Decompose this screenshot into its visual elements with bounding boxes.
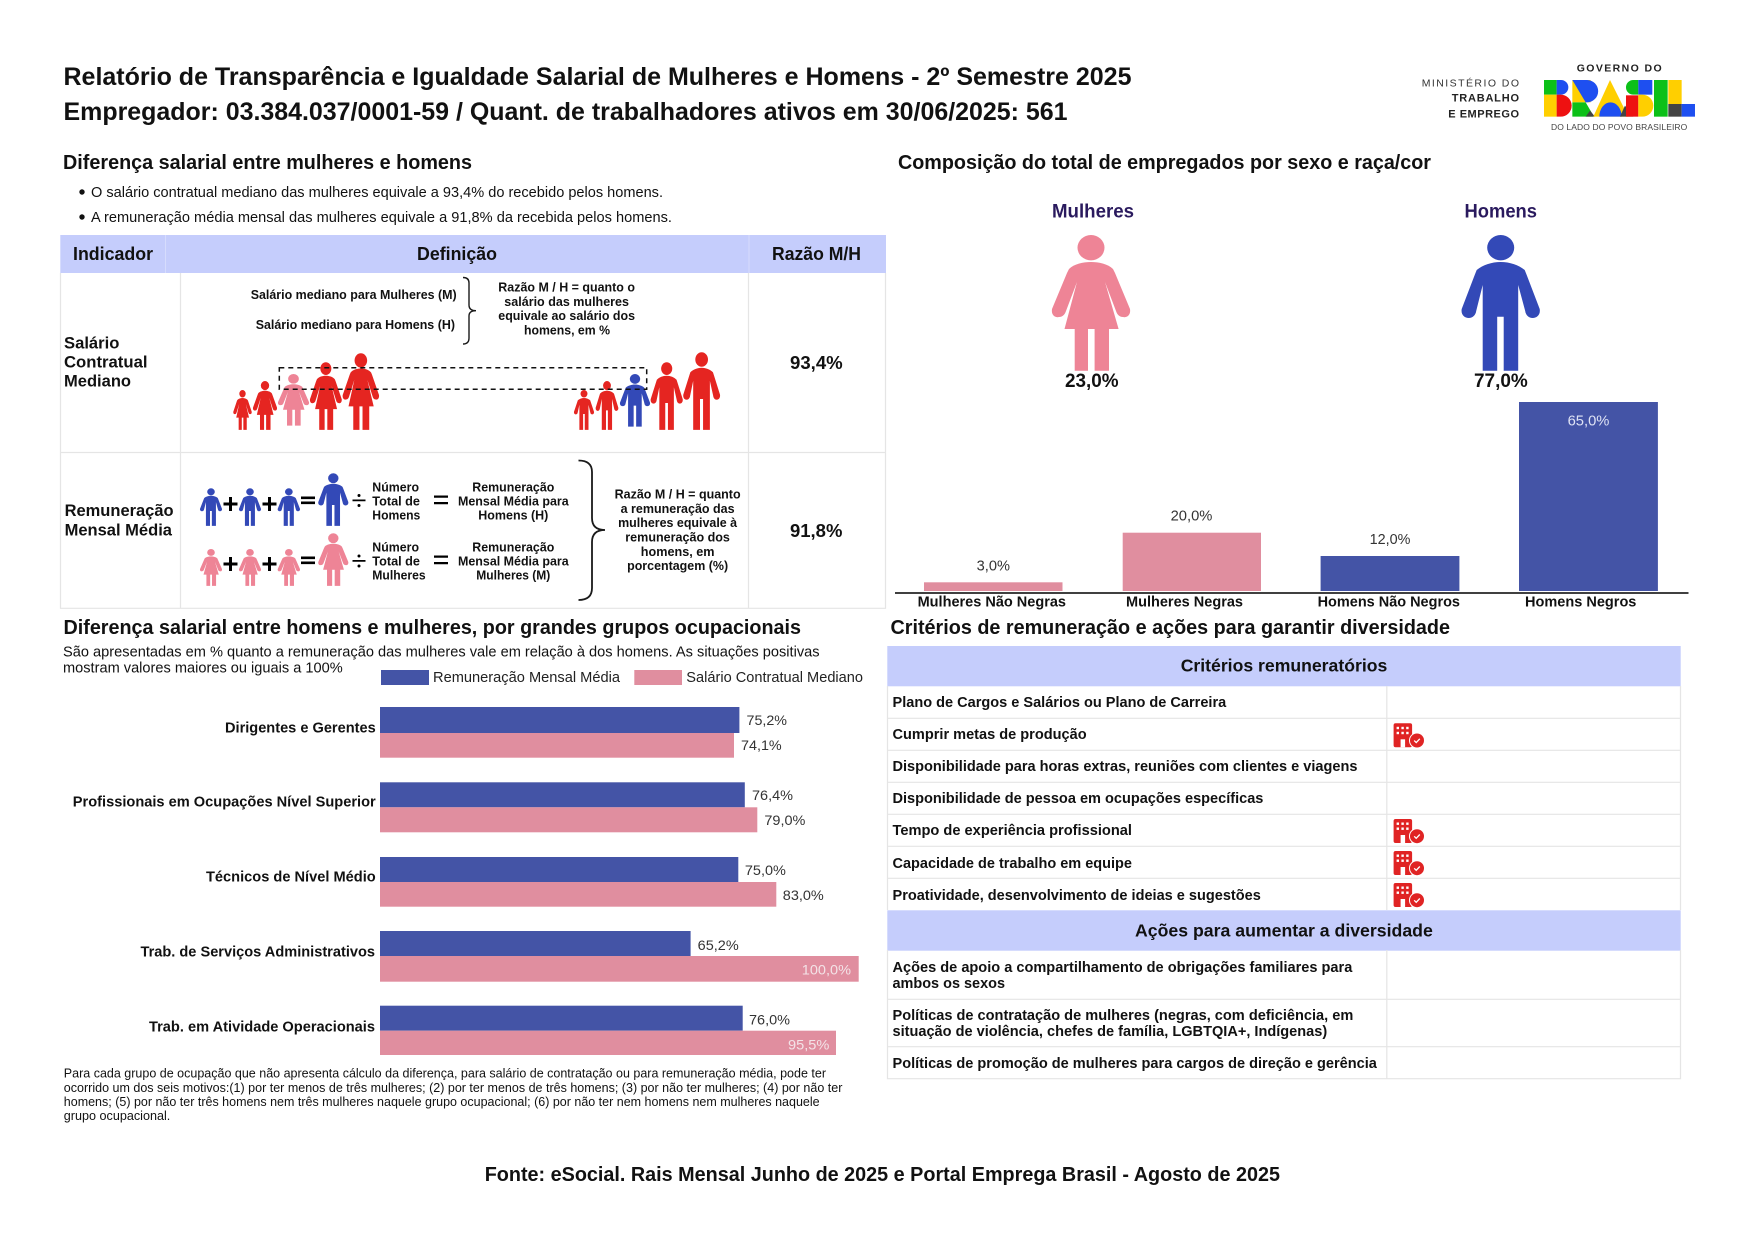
bullet list: O salário contratual mediano das mulheres equivale a 93,4% do recebido pelos homens.	[91, 184, 663, 201]
title: Relatório de Transparência e Igualdade Salarial de Mulheres e Homens - 2º Semestre 2025	[64, 63, 1132, 91]
column chart: 3,0%	[977, 559, 1010, 575]
row: remuneração mensal média	[65, 460, 842, 600]
icon: men ordered by salary	[574, 352, 720, 430]
men share: Homens	[1464, 201, 1537, 223]
panel: composição por sexo e raça/cor	[895, 152, 1688, 611]
footnote	[64, 1065, 843, 1123]
definition text: Razão M / H = quanto	[615, 487, 741, 502]
bars: dirigentes e gerentes	[225, 707, 787, 758]
formula: men: Número	[372, 480, 419, 495]
column chart: Homens Negros	[1525, 595, 1636, 611]
column chart: 65,0%	[1568, 414, 1609, 430]
row label: Remuneração	[65, 502, 174, 520]
dashed median box	[279, 368, 647, 389]
bars: dirigentes e gerentes: 75,2%	[746, 712, 787, 728]
bars: profissionais: Profissionais em Ocupações Nível Superior	[73, 795, 376, 811]
definition text	[251, 280, 635, 337]
definition text: homens, em	[641, 544, 714, 559]
bars: técnicos: 83,0%	[783, 887, 824, 903]
table: critérios remuneratórios	[887, 646, 1681, 910]
definition text: homens, em %	[524, 322, 610, 337]
bullet list	[79, 184, 672, 226]
table: critérios remuneratórios: Plano de Cargos e Salários ou Plano de Carreira	[892, 695, 1227, 711]
women share: 23,0%	[1065, 371, 1119, 392]
icon: women ordered by salary	[233, 353, 379, 430]
women share: Mulheres	[1052, 201, 1134, 223]
formula: men: Homens	[372, 507, 420, 522]
legend: Remuneração Mensal Média	[433, 670, 621, 686]
bullet list: A remuneração média mensal das mulheres equivale a 91,8% da recebida pelos homens.	[91, 209, 672, 226]
description: mostram valores maiores ou iguais a 100%	[63, 661, 343, 677]
bars: profissionais: 76,4%	[752, 787, 793, 803]
brace	[578, 460, 605, 600]
brace	[463, 278, 476, 344]
formula: men: Homens (H)	[478, 507, 548, 522]
row: salário contratual mediano	[64, 278, 843, 430]
title: Empregador: 03.384.037/0001-59 / Quant. de trabalhadores ativos em 30/06/2025: 561	[64, 98, 1068, 126]
source note: Fonte: eSocial. Rais Mensal Junho de 2025 e Portal Emprega Brasil - Agosto de 2025	[485, 1164, 1280, 1186]
table: ações para aumentar a diversidade: situação de violência, chefes de família, LGBTQIA+, Indígenas)	[892, 1024, 1327, 1040]
legend: Salário Contratual Mediano	[686, 670, 863, 686]
bars: atividade operacionais: 95,5%	[788, 1036, 829, 1052]
table header	[60, 235, 886, 273]
column chart: 12,0%	[1370, 532, 1410, 548]
bars: serviços administrativos: 65,2%	[698, 937, 739, 953]
value: 93,4%	[790, 353, 843, 373]
definition text: remuneração dos	[625, 530, 730, 544]
formula: women: Mulheres	[372, 567, 426, 582]
bars: serviços administrativos: 100,0%	[802, 961, 851, 977]
logo: governo do brasil: DO LADO DO POVO BRASILEIRO	[1551, 122, 1688, 132]
bars: atividade operacionais: 76,0%	[749, 1011, 790, 1027]
formula: women: Total de	[372, 554, 420, 569]
column chart: Homens Não Negros	[1318, 595, 1460, 611]
formula: men: Total de	[372, 494, 420, 509]
formula: women	[200, 533, 569, 586]
column chart: Mulheres Negras	[1126, 595, 1243, 611]
table: critérios remuneratórios: Critérios remuneratórios	[1181, 656, 1388, 676]
row label	[65, 502, 174, 539]
footnote: homens; (5) por não ter três homens nem três mulheres naquele grupo ocupacional; (6) por não ter nem homens nem mulheres naquele	[64, 1094, 820, 1109]
men share: 77,0%	[1474, 371, 1528, 392]
table: ações para aumentar a diversidade	[887, 910, 1681, 1079]
icon: company check	[1394, 819, 1425, 844]
women share	[1052, 201, 1134, 392]
row label	[64, 334, 148, 391]
bars: dirigentes e gerentes: Dirigentes e Gerentes	[225, 721, 376, 737]
logo: ministério do trabalho e emprego: TRABALHO	[1452, 93, 1519, 105]
row label: Salário	[64, 334, 119, 352]
column chart: 20,0%	[1171, 509, 1212, 525]
table header: Razão M/H	[772, 244, 861, 264]
table header: Indicador	[73, 244, 153, 264]
heading: Diferença salarial entre mulheres e homens	[63, 152, 472, 174]
table: ações para aumentar a diversidade: Políticas de contratação de mulheres (negras, com deficiência, em	[892, 1008, 1353, 1024]
panel: critérios de remuneração e ações	[887, 617, 1681, 1079]
definition text: Razão M / H = quanto o	[498, 280, 635, 295]
bars: serviços administrativos: Trab. de Serviços Administrativos	[140, 945, 375, 961]
footnote: grupo ocupacional.	[64, 1108, 170, 1123]
formula: women: Número	[372, 540, 419, 555]
formula: women: Remuneração	[472, 540, 554, 555]
men share	[1462, 201, 1540, 392]
icon: company check	[1394, 883, 1425, 908]
table: ações para aumentar a diversidade: Ações de apoio a compartilhamento de obrigações familiares para	[892, 960, 1353, 976]
row label: Contratual	[64, 354, 148, 372]
table: critérios remuneratórios: Capacidade de trabalho em equipe	[892, 856, 1132, 872]
column chart: Mulheres Não Negras	[918, 595, 1066, 611]
definition text: salário das mulheres	[504, 294, 629, 309]
definition text: equivale ao salário dos	[498, 308, 635, 323]
definition text: Salário mediano para Mulheres (M)	[251, 287, 457, 302]
table: critérios remuneratórios: Disponibilidade para horas extras, reuniões com clientes e viagens	[892, 759, 1358, 775]
bar chart	[73, 707, 859, 1055]
row label: Mensal Média	[65, 521, 173, 539]
formula: men	[200, 473, 569, 526]
bars: técnicos: 75,0%	[745, 862, 786, 878]
formula: women: Mensal Média para	[458, 554, 569, 569]
logo: governo do brasil	[1544, 63, 1695, 132]
bars: profissionais: 79,0%	[764, 812, 805, 828]
table: critérios remuneratórios: Tempo de experiência profissional	[892, 823, 1132, 839]
bars: profissionais	[73, 782, 805, 832]
table: ações para aumentar a diversidade: Políticas de promoção de mulheres para cargos de direção e gerência	[892, 1056, 1378, 1072]
definition text: porcentagem (%)	[627, 558, 728, 573]
table: ações para aumentar a diversidade: Ações para aumentar a diversidade	[1135, 921, 1433, 941]
column chart	[895, 402, 1688, 611]
definition text: Salário mediano para Homens (H)	[256, 317, 455, 332]
bars: técnicos	[206, 857, 824, 907]
bars: dirigentes e gerentes: 74,1%	[741, 737, 782, 753]
formula: women: Mulheres (M)	[476, 567, 550, 582]
row label: Mediano	[64, 373, 131, 391]
formula: men: Mensal Média para	[458, 494, 569, 509]
logo: ministério do trabalho e emprego	[1422, 77, 1519, 120]
heading: Critérios de remuneração e ações para garantir diversidade	[890, 617, 1450, 639]
value: 91,8%	[790, 521, 842, 541]
logo: ministério do trabalho e emprego: E EMPREGO	[1448, 108, 1519, 120]
footnote: ocorrido um dos seis motivos:(1) por ter menos de três mulheres; (2) por ter menos de três homens; (3) por não ter mulheres; (4) por não ter	[64, 1080, 843, 1095]
definition text: mulheres equivale à	[618, 515, 738, 530]
logo: governo do brasil: GOVERNO DO	[1577, 63, 1662, 75]
description	[63, 645, 820, 677]
bars: atividade operacionais: Trab. em Atividade Operacionais	[149, 1020, 375, 1036]
title	[64, 63, 1132, 126]
table: ações para aumentar a diversidade: ambos os sexos	[892, 976, 1005, 992]
bars: técnicos: Técnicos de Nível Médio	[206, 870, 376, 886]
heading: Diferença salarial entre homens e mulheres, por grandes grupos ocupacionais	[64, 617, 801, 639]
definition text	[615, 487, 741, 573]
heading: Composição do total de empregados por sexo e raça/cor	[898, 152, 1431, 174]
table header: Definição	[417, 244, 497, 264]
bars: atividade operacionais	[149, 1006, 836, 1055]
formula: men: Remuneração	[472, 480, 554, 495]
table: critérios remuneratórios: Proatividade, desenvolvimento de ideias e sugestões	[892, 888, 1261, 904]
icon: company check	[1394, 851, 1425, 876]
footnote: Para cada grupo de ocupação que não apresenta cálculo da diferença, para salário de contratação ou para remuneração média, pode ter	[64, 1065, 827, 1080]
definition text: a remuneração das	[621, 501, 735, 516]
description: São apresentadas em % quanto a remuneração das mulheres vale em relação à dos homens. As situações positivas	[63, 645, 820, 661]
table grid	[60, 273, 886, 608]
logo: ministério do trabalho e emprego: MINISTÉRIO DO	[1422, 77, 1519, 90]
table: critérios remuneratórios: Disponibilidade de pessoa em ocupações específicas	[892, 791, 1263, 807]
table: critérios remuneratórios: Cumprir metas de produção	[892, 727, 1087, 743]
panel: diferença salarial por grandes grupos ocupacionais	[63, 617, 863, 1123]
bars: serviços administrativos	[140, 931, 859, 982]
icon: company check	[1394, 723, 1425, 748]
legend	[381, 670, 863, 686]
panel: diferença salarial entre mulheres e homens	[60, 152, 886, 608]
